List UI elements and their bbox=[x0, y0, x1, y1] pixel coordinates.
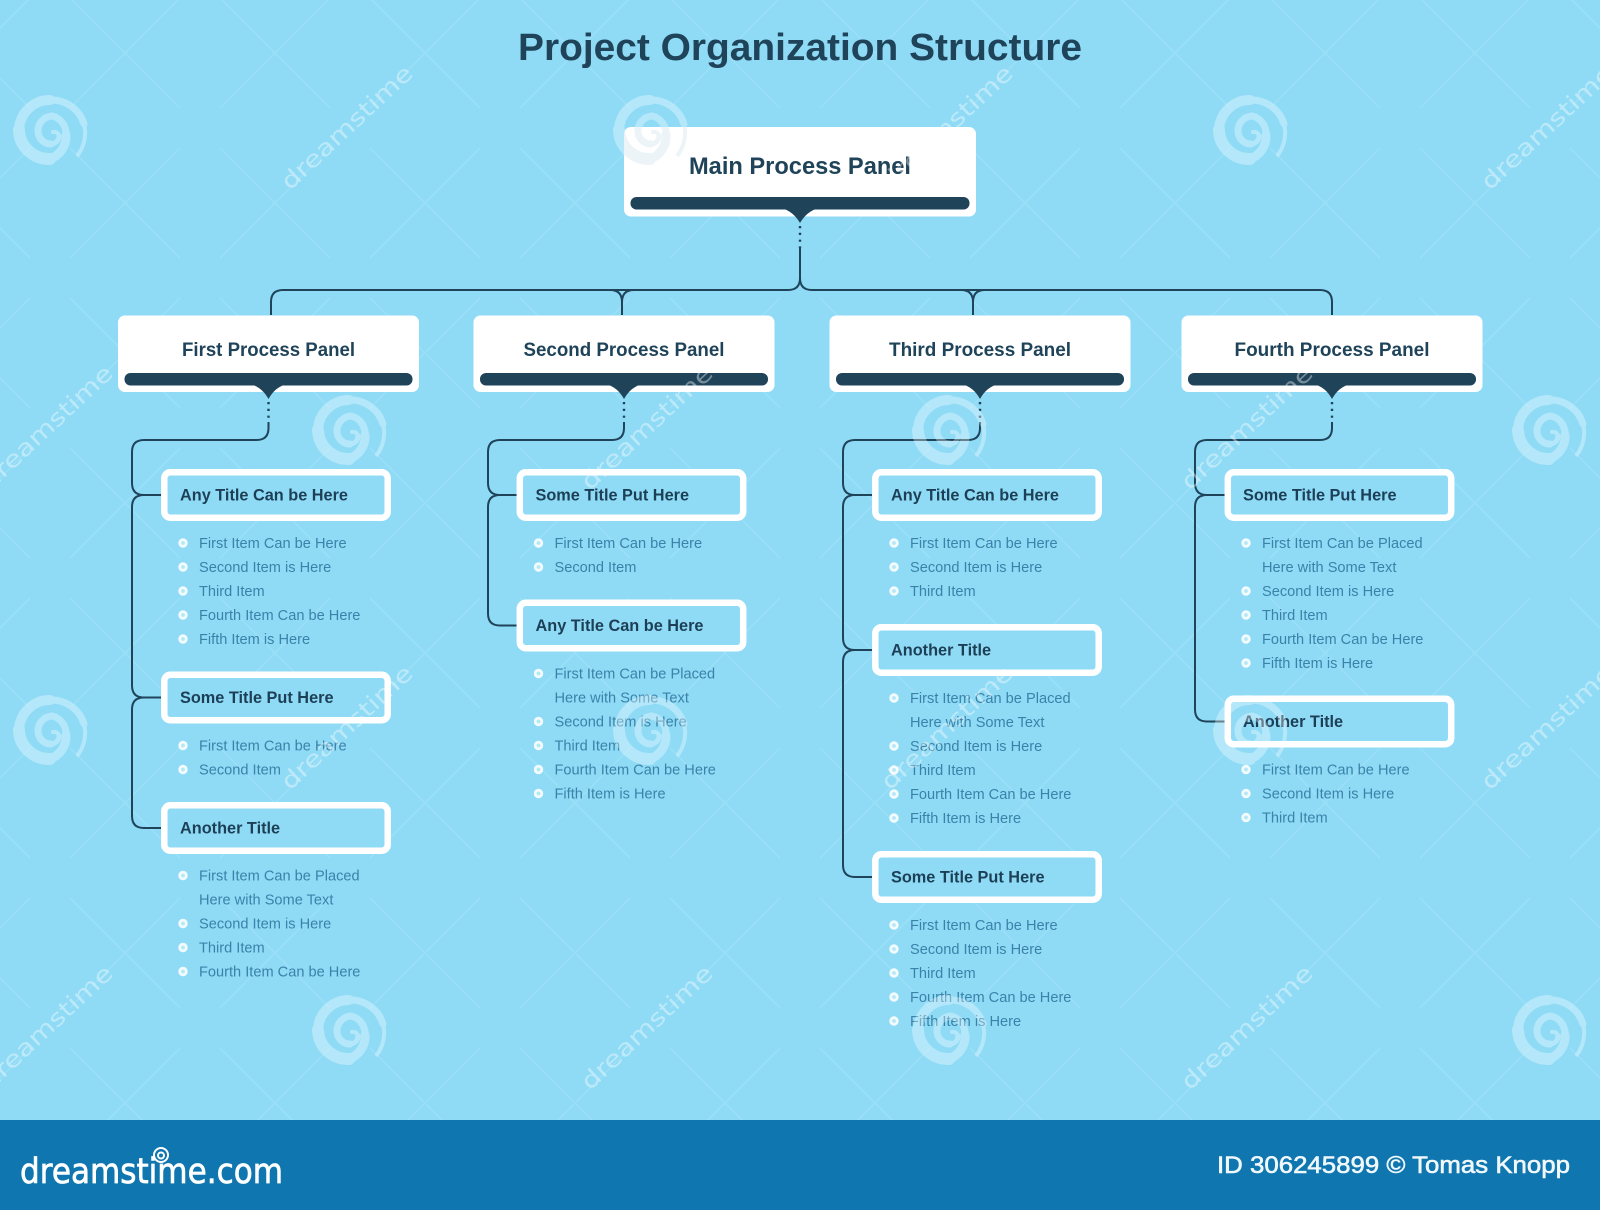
column 2, box 1: list: Second Item bbox=[554, 560, 636, 576]
column 3, box 2: list: Here with Some Text bbox=[910, 715, 1044, 731]
column 1, box 3: list: Third Item bbox=[199, 940, 265, 956]
column 3, box 1: list: Second Item is Here bbox=[910, 560, 1042, 576]
column 1, box 3: list: First Item Can be Placed bbox=[199, 868, 360, 884]
column 1, box 1: title bbox=[164, 472, 388, 518]
panel: second process: Second Process Panel bbox=[524, 339, 724, 361]
column 1, box 1: list bbox=[180, 536, 360, 648]
column 3, box 1: title: Any Title Can be Here bbox=[891, 486, 1059, 504]
column 3, box 2: title: Another Title bbox=[891, 642, 991, 660]
column 4, box 1: list: Second Item is Here bbox=[1262, 584, 1394, 600]
column 2, box 2: list bbox=[535, 666, 716, 802]
watermark spirals bbox=[19, 100, 1584, 1059]
connector: second column bbox=[488, 402, 624, 626]
column 4, box 2: title bbox=[1228, 699, 1451, 744]
column 1, box 2: title bbox=[164, 675, 388, 720]
column 1, box 3: list: Second Item is Here bbox=[199, 916, 331, 932]
column 1, box 1: list: Second Item is Here bbox=[199, 560, 331, 576]
column 4, box 1: list: Fifth Item is Here bbox=[1262, 656, 1373, 672]
column 2, box 2: list: Third Item bbox=[554, 738, 620, 754]
footer bar bbox=[0, 1120, 1600, 1210]
column 1, box 2: list bbox=[180, 738, 347, 778]
column 4, box 2: list: Second Item is Here bbox=[1262, 786, 1394, 802]
panel: fourth process: Fourth Process Panel bbox=[1234, 339, 1430, 361]
column 1, box 3: title: Another Title bbox=[180, 820, 280, 838]
panel: first process bbox=[118, 316, 419, 399]
column 4, box 1: list: First Item Can be Placed bbox=[1262, 536, 1423, 552]
watermark text: dreamstime bbox=[1476, 660, 1600, 795]
column 3, box 3: list: First Item Can be Here bbox=[910, 918, 1058, 934]
column 4, box 2: list: First Item Can be Here bbox=[1262, 762, 1410, 778]
watermark text: dreamstime bbox=[576, 360, 718, 495]
panel: third process: Third Process Panel bbox=[889, 339, 1071, 361]
column 1, box 1: list: Third Item bbox=[199, 584, 265, 600]
column 2, box 2: list: First Item Can be Placed bbox=[554, 666, 715, 682]
column 3, box 2: list: First Item Can be Placed bbox=[910, 691, 1071, 707]
column 1, box 3: list bbox=[180, 868, 360, 980]
column 4, box 1: list: Fourth Item Can be Here bbox=[1262, 632, 1423, 648]
column 3, box 1: title bbox=[875, 472, 1099, 518]
connector: third column bbox=[843, 402, 980, 877]
panel: main process: Main Process Panel bbox=[689, 153, 911, 180]
column 1, box 3: title bbox=[164, 805, 388, 851]
column 4, box 1: list: Here with Some Text bbox=[1262, 560, 1396, 576]
column 3, box 2: list: Fifth Item is Here bbox=[910, 811, 1021, 827]
column 2, box 1: list: First Item Can be Here bbox=[554, 536, 702, 552]
column 1, box 1: list: First Item Can be Here bbox=[199, 536, 347, 552]
column 3, box 1: list: Third Item bbox=[910, 584, 976, 600]
watermark text: dreamstime bbox=[1176, 360, 1318, 495]
watermark text: dreamstime bbox=[876, 60, 1018, 195]
watermark text: dreamstime bbox=[1176, 960, 1318, 1095]
panel: fourth process bbox=[1182, 316, 1482, 399]
column 1, box 2: title: Some Title Put Here bbox=[180, 689, 334, 707]
column 4, box 1: list: Third Item bbox=[1262, 608, 1328, 624]
column 2, box 2: title: Any Title Can be Here bbox=[536, 617, 704, 635]
column 1, box 3: list: Fourth Item Can be Here bbox=[199, 964, 360, 980]
column 4, box 2: list: Third Item bbox=[1262, 810, 1328, 826]
column 2, box 2: list: Fifth Item is Here bbox=[554, 786, 666, 802]
column 3, box 3: list bbox=[891, 918, 1071, 1030]
column 2, box 1: list bbox=[535, 536, 702, 576]
connector: fourth column bbox=[1195, 402, 1332, 722]
column 4, box 1: title: Some Title Put Here bbox=[1243, 486, 1397, 504]
footer credit: ID 306245899 © Tomas Knopp bbox=[1217, 1152, 1570, 1179]
column 3, box 2: list: Second Item is Here bbox=[910, 739, 1042, 755]
column 4, box 2: list bbox=[1243, 762, 1410, 826]
column 3, box 3: title: Some Title Put Here bbox=[891, 868, 1045, 886]
connector: main panel to process panels bbox=[271, 226, 1332, 315]
watermark spiral tint over main panel bbox=[624, 127, 687, 165]
column 3, box 3: list: Third Item bbox=[910, 966, 976, 982]
column 3, box 3: title bbox=[875, 854, 1099, 900]
watermark text: dreamstime bbox=[576, 960, 718, 1095]
watermark text: dreamstime bbox=[276, 60, 418, 195]
column 2, box 2: list: Second Item is Here bbox=[554, 714, 687, 730]
title: Project Organization Structure bbox=[518, 27, 1082, 69]
watermark text: dreamstime bbox=[1476, 60, 1600, 195]
column 2, box 2: list: Fourth Item Can be Here bbox=[554, 762, 716, 778]
connector: first column bbox=[132, 402, 268, 828]
column 3, box 2: list bbox=[891, 691, 1071, 827]
column 1, box 1: list: Fourth Item Can be Here bbox=[199, 608, 360, 624]
column 2, box 1: title: Some Title Put Here bbox=[536, 486, 689, 504]
column 4, box 2: title: Another Title bbox=[1243, 713, 1343, 731]
column 2, box 2: list: Here with Some Text bbox=[554, 690, 689, 706]
column 4, box 1: title bbox=[1228, 472, 1451, 518]
column 3, box 1: list: First Item Can be Here bbox=[910, 536, 1058, 552]
column 3, box 2: list: Third Item bbox=[910, 763, 976, 779]
watermark text: dreamstime bbox=[276, 660, 418, 795]
column 2, box 1: title bbox=[520, 472, 743, 518]
column 4, box 1: list bbox=[1243, 536, 1423, 672]
column 1, box 2: list: First Item Can be Here bbox=[199, 738, 347, 754]
column 3, box 3: list: Fifth Item is Here bbox=[910, 1014, 1021, 1030]
column 1, box 1: list: Fifth Item is Here bbox=[199, 632, 310, 648]
panel: third process bbox=[830, 316, 1130, 399]
column 3, box 2: list: Fourth Item Can be Here bbox=[910, 787, 1071, 803]
panel: second process bbox=[474, 316, 774, 399]
column 3, box 2: title bbox=[875, 627, 1099, 673]
column 3, box 3: list: Fourth Item Can be Here bbox=[910, 990, 1071, 1006]
column 3, box 3: list: Second Item is Here bbox=[910, 942, 1042, 958]
panel: first process: First Process Panel bbox=[182, 339, 355, 361]
column 1, box 2: list: Second Item bbox=[199, 762, 281, 778]
footer logo text: dreamstime.com bbox=[20, 1152, 283, 1192]
column 1, box 1: title: Any Title Can be Here bbox=[180, 486, 348, 504]
column 3, box 1: list bbox=[891, 536, 1058, 600]
panel: main process bbox=[624, 127, 976, 223]
footer logo spiral bbox=[154, 1148, 168, 1162]
column 2, box 2: title bbox=[520, 603, 743, 648]
column 1, box 3: list: Here with Some Text bbox=[199, 892, 333, 908]
watermark text: dreamstime bbox=[876, 660, 1018, 795]
